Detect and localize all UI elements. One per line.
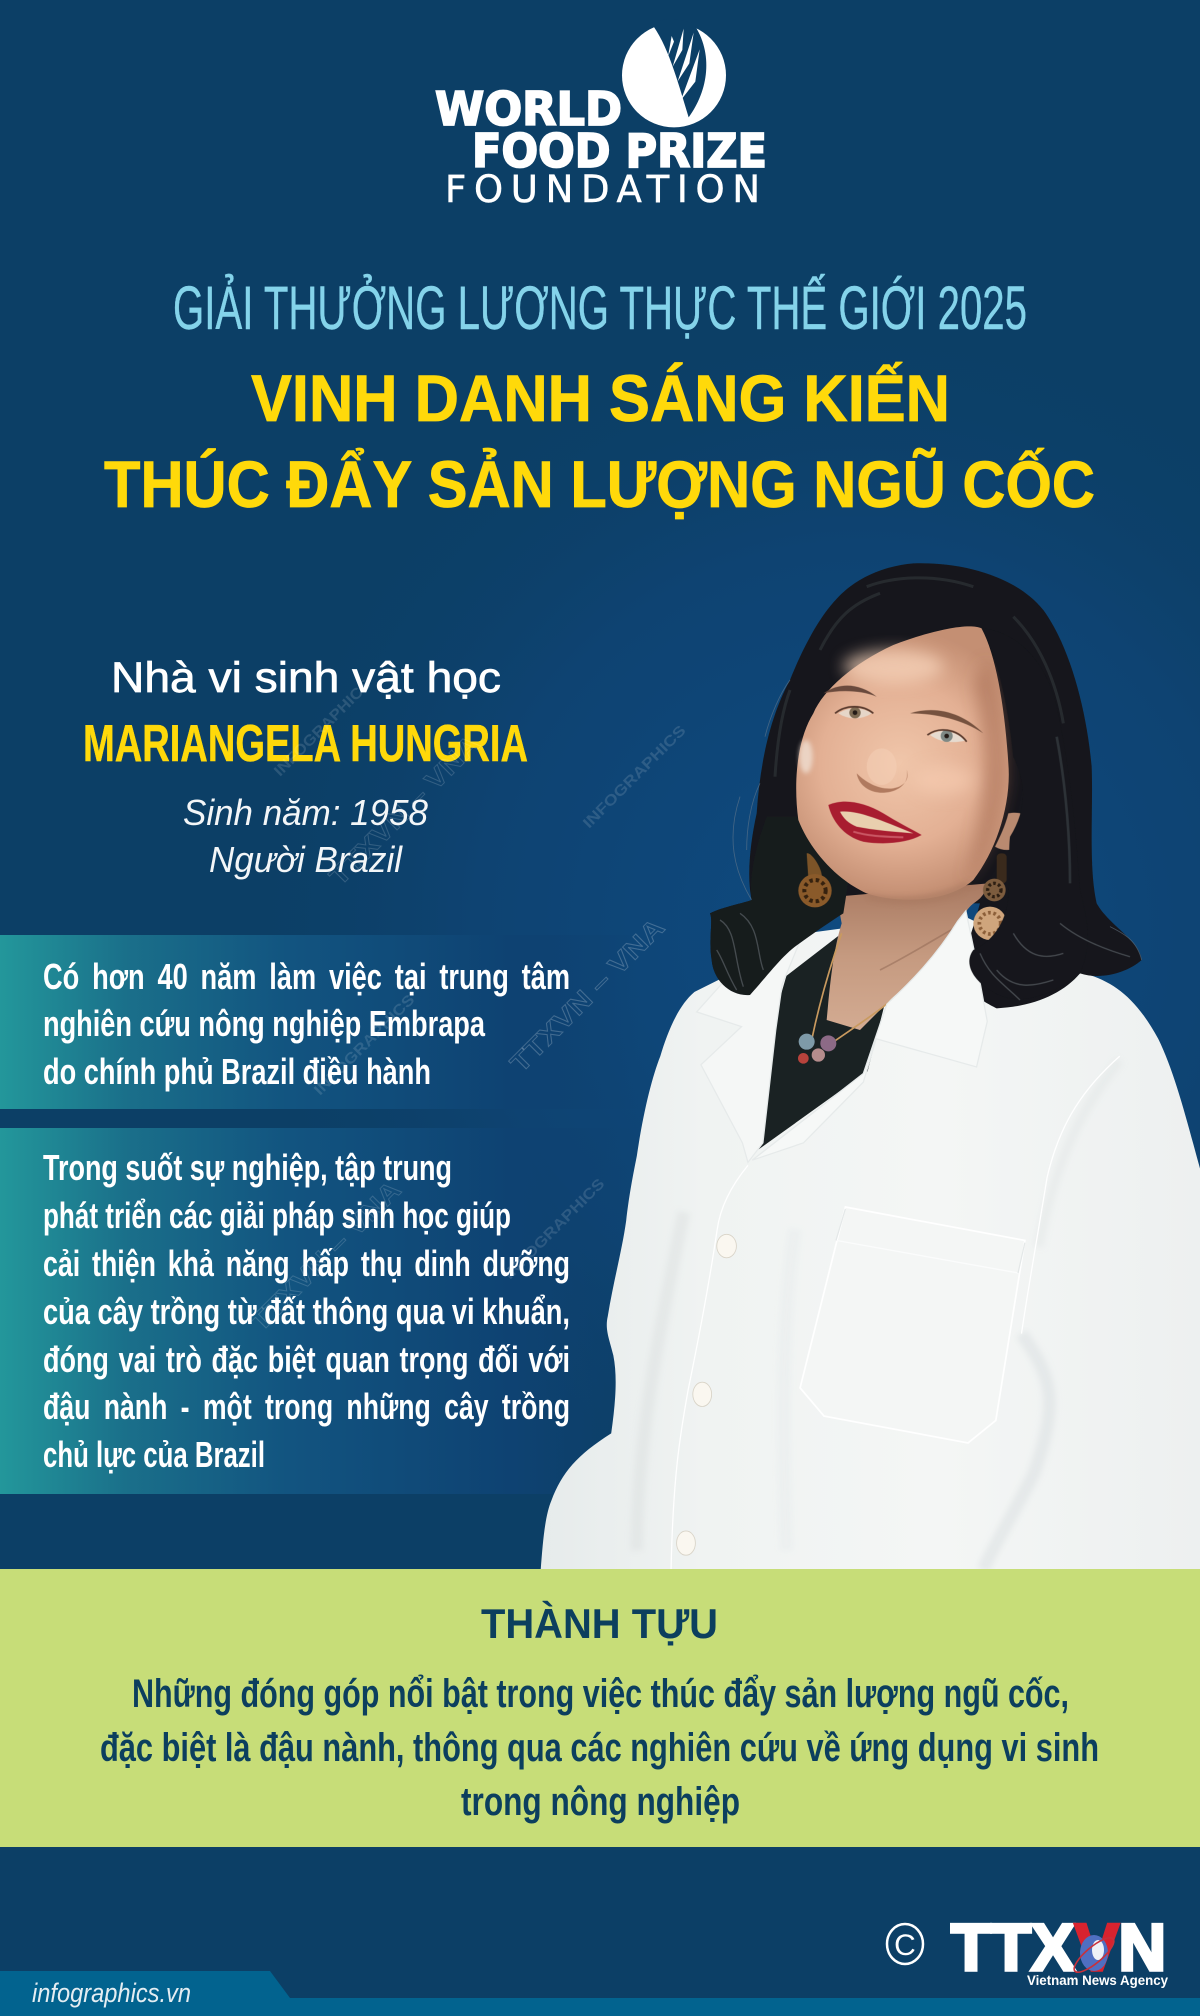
copyright symbol: C	[894, 1929, 916, 1962]
coat collar and lapels	[697, 911, 987, 1162]
background glow behind portrait	[200, 290, 1200, 1570]
buttons	[677, 1234, 736, 1555]
pendant	[798, 1034, 836, 1064]
title block	[104, 274, 1095, 521]
right hair strands	[980, 737, 1130, 1000]
watermarks: INFOGRAPHICS	[271, 676, 375, 780]
logo word: FOUNDATION: FOUNDATION	[445, 168, 760, 211]
website label: infographics.vn	[32, 1978, 191, 2008]
lips and teeth	[828, 802, 922, 843]
logo letters: TTXVN	[951, 1910, 1166, 1984]
panel text: Có hơn 40 năm làm việc tại trung tâm	[43, 956, 570, 997]
watermarks: INFOGRAPHICS	[501, 1175, 608, 1283]
achievements text: trong nông nghiệp	[461, 1780, 740, 1824]
headline line 2: THÚC ĐẨY SẢN LƯỢNG NGŨ CỐC	[104, 447, 1095, 521]
logo word: FOOD PRIZE: FOOD PRIZE	[472, 124, 767, 178]
watermarks: INFOGRAPHICS	[311, 991, 418, 1099]
panel text	[43, 1147, 570, 1475]
panel text: phát triển các giải pháp sinh học giúp	[43, 1195, 511, 1236]
panel text: của cây trồng từ đất thông qua vi khuẩn,	[43, 1291, 570, 1332]
name: MARIANGELA HUNGRIA	[83, 715, 528, 773]
white lab coat	[541, 913, 1200, 1570]
birth year: Sinh năm: 1958	[183, 792, 428, 833]
portrait: Mariangela Hungria	[541, 563, 1200, 1570]
nose	[857, 748, 908, 793]
flyaway hair	[733, 680, 1142, 960]
panel text: nghiên cứu nông nghiệp Embrapa	[43, 1003, 486, 1044]
panel text: đậu nành - một trong những cây trồng	[43, 1386, 570, 1427]
profile block	[83, 654, 528, 880]
chin shadow	[867, 880, 970, 904]
left lock strands	[717, 913, 763, 990]
eyebrows	[823, 686, 877, 697]
panel: achievements	[0, 1569, 1200, 1847]
panel text: Trong suốt sự nghiệp, tập trung	[43, 1147, 452, 1188]
copyright symbol	[887, 1924, 923, 1964]
coat shading	[637, 1060, 1120, 1570]
achievements text	[100, 1672, 1099, 1824]
cheek highlight	[799, 740, 813, 773]
necklace	[812, 933, 893, 1047]
agency name: Vietnam News Agency	[1027, 1972, 1168, 1988]
ear	[995, 813, 1029, 850]
black top	[759, 935, 885, 1149]
panel text: đóng vai trò đặc biệt quan trọng đối với	[43, 1339, 570, 1380]
coat seams	[671, 1056, 1120, 1570]
pocket	[800, 1207, 1025, 1443]
left hair lock over collar	[710, 817, 853, 995]
eyes	[835, 707, 967, 742]
panel text	[43, 956, 570, 1092]
achievements heading: THÀNH TỰU	[481, 1600, 718, 1647]
globe emblem	[1070, 1933, 1118, 1977]
panel text: cải thiện khả năng hấp thụ dinh dưỡng	[43, 1243, 570, 1284]
nationality: Người Brazil	[209, 839, 403, 880]
logo: World Food Prize Foundation	[435, 19, 767, 211]
headline line 1: VINH DANH SÁNG KIẾN	[251, 361, 950, 435]
occupation: Nhà vi sinh vật học	[111, 654, 501, 702]
panel text: do chính phủ Brazil điều hành	[43, 1051, 431, 1092]
left earring	[798, 853, 832, 907]
panel text: chủ lực của Brazil	[43, 1434, 265, 1475]
neck and chest	[812, 883, 988, 1047]
watermarks: TTXVN – VNA	[244, 1174, 407, 1337]
front hair lock	[969, 628, 1088, 999]
footer band with website tab	[0, 1971, 1200, 2016]
icon: wheat leaf circle	[622, 19, 726, 127]
panel: research focus	[0, 1128, 640, 1494]
face shading	[843, 650, 1007, 880]
logo word: WORLD: WORLD	[435, 82, 622, 136]
hair sheen	[775, 578, 1063, 777]
watermarks: TTXVN – VNA	[504, 912, 670, 1078]
face	[796, 626, 1130, 1000]
watermarks: INFOGRAPHICS	[580, 722, 689, 832]
hair, back layer	[710, 563, 1142, 1008]
right earring	[973, 853, 1007, 940]
watermarks: TTXVN – VNA	[323, 728, 486, 891]
watermarks	[244, 676, 689, 1337]
panel: career at Embrapa	[0, 935, 640, 1109]
TTXVN logo	[951, 1910, 1168, 1988]
